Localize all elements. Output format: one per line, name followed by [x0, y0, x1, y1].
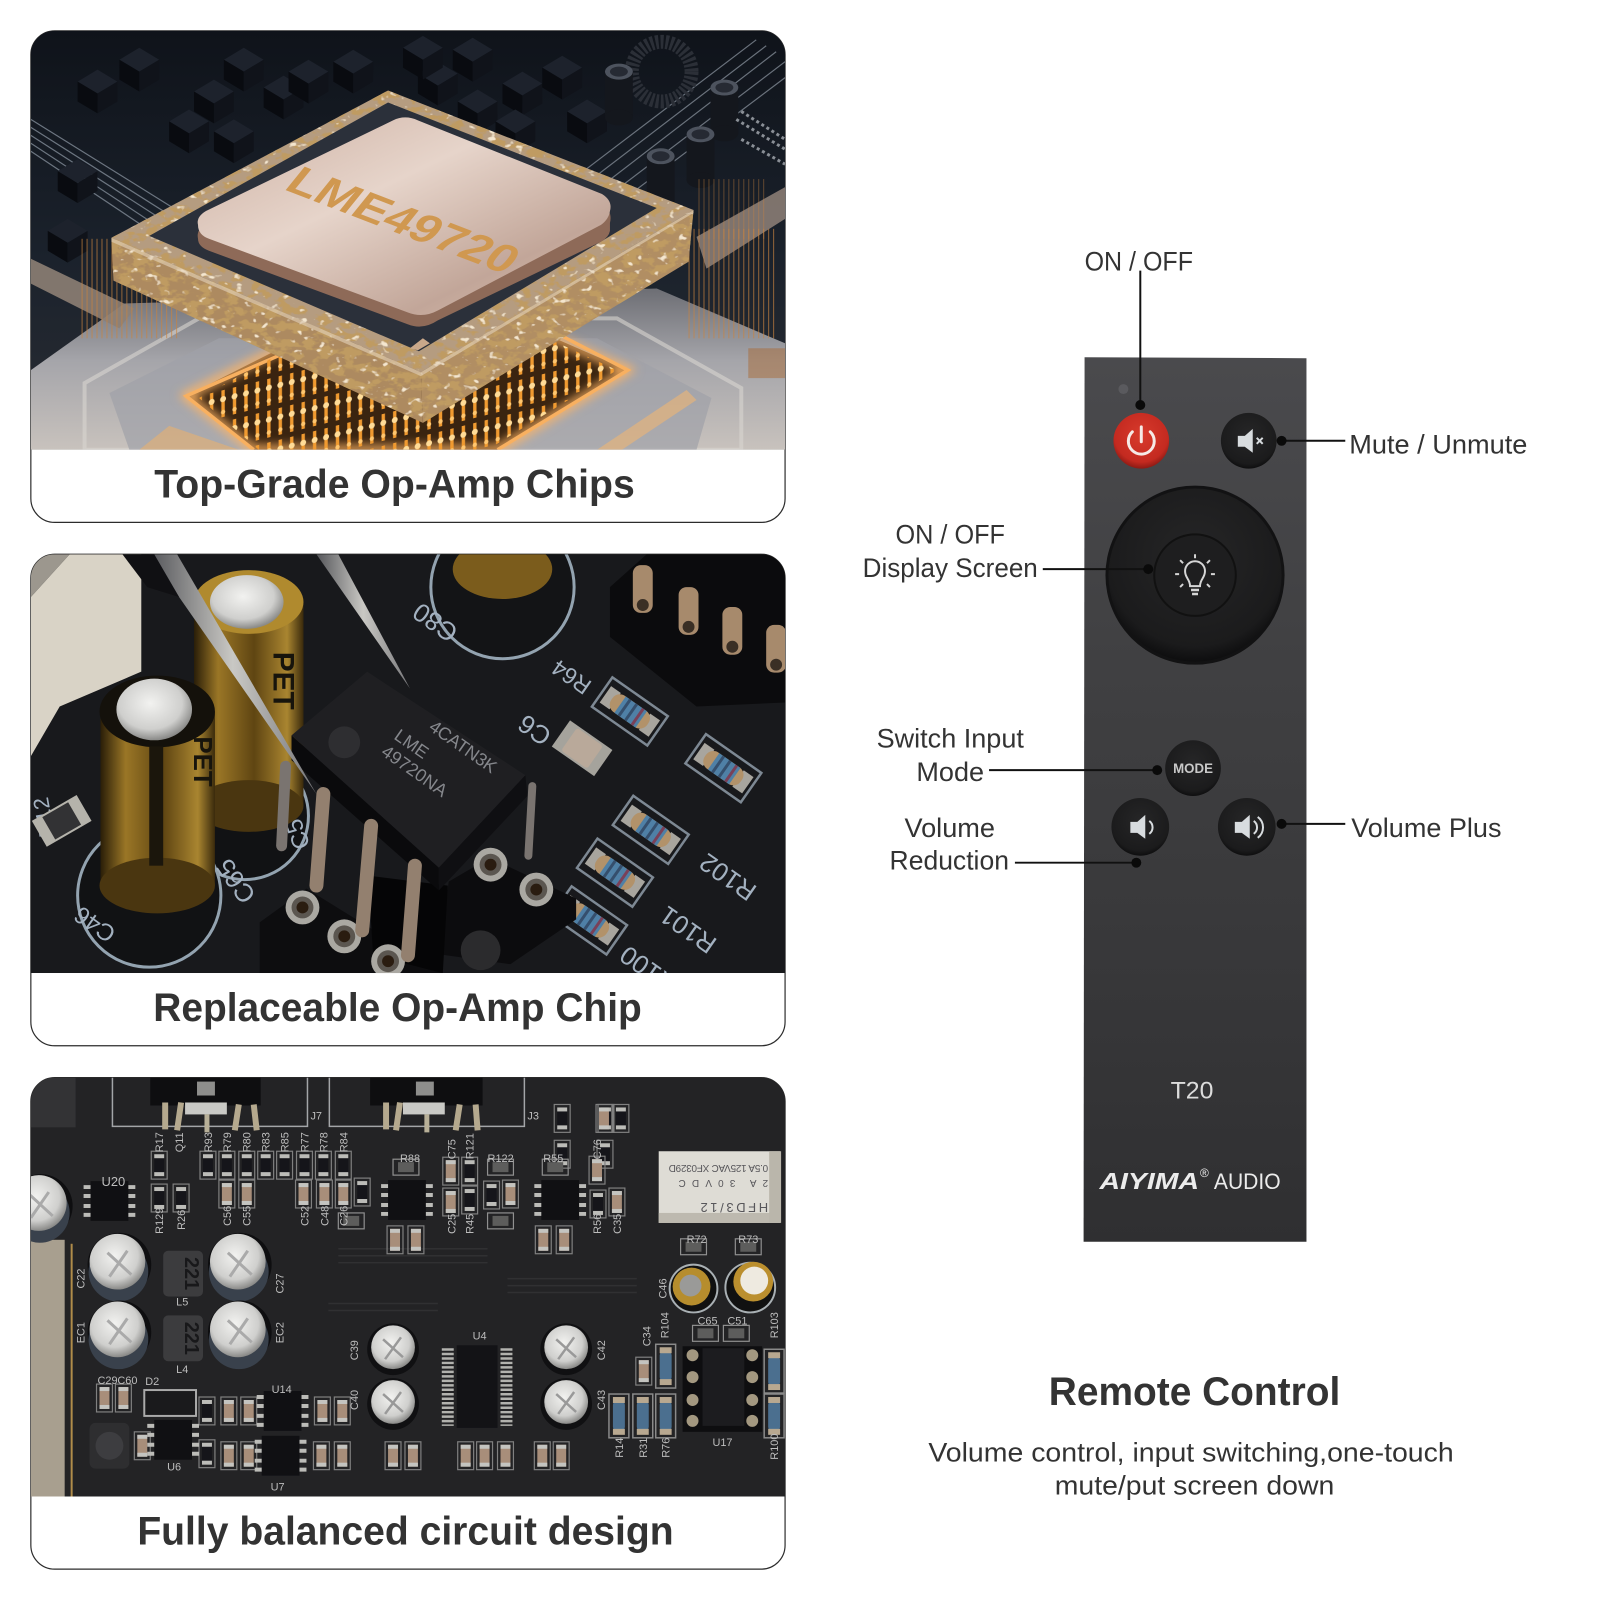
silkscreen designators: R121 — [465, 1133, 477, 1159]
remote control — [1084, 357, 1306, 1242]
panel: top-grade op-amp chips — [31, 31, 785, 522]
callout: display screen: ON / OFF — [896, 519, 1005, 549]
silkscreen designators: U7 — [271, 1482, 285, 1494]
silkscreen designators: R93 — [203, 1132, 215, 1152]
relay block — [31, 554, 141, 756]
silkscreen designators: C40 — [349, 1390, 361, 1410]
button: mode — [1165, 740, 1221, 796]
photo: chip held by tweezers above socket: R101 — [655, 900, 722, 958]
photo: chip held by tweezers above socket: R100 — [615, 940, 682, 998]
silkscreen designators: C76 — [592, 1139, 604, 1159]
photo: chip held by tweezers above socket: R102 — [695, 847, 762, 906]
relay: 2A 30VDC — [679, 1177, 768, 1188]
dark chip substrate — [149, 102, 657, 351]
silkscreen designators: C39 — [349, 1340, 361, 1360]
silkscreen designators: C46 — [658, 1278, 670, 1299]
silkscreen designators: C22 — [76, 1268, 88, 1289]
silkscreen designators: C29 — [98, 1375, 118, 1387]
capacitor: rear: PET — [267, 652, 300, 710]
silkscreen designators: C55 — [242, 1206, 254, 1226]
photo: chip held by tweezers above socket: C6 — [514, 708, 557, 750]
icon: light bulb — [1175, 554, 1215, 594]
silkscreen designators: R72 — [687, 1234, 707, 1246]
relay: 0.5A 125VAC XF0329D — [669, 1162, 768, 1173]
callout: input mode: Mode — [916, 757, 984, 787]
chip legs — [282, 766, 532, 955]
silkscreen designators: D2 — [145, 1376, 159, 1388]
silkscreen designators: EC2 — [275, 1322, 287, 1343]
photo: chip held by tweezers above socket: C46 — [69, 900, 121, 948]
callout: input mode: Switch Input — [877, 723, 1024, 753]
silkscreen designators: C35 — [612, 1214, 624, 1234]
silkscreen designators: R17 — [154, 1132, 166, 1152]
photo: chip held by tweezers above socket: C51 — [276, 803, 316, 853]
silkscreen designators: R56 — [592, 1214, 604, 1234]
photo: chip held by tweezers above socket: C80 — [408, 597, 463, 647]
silkscreen designators: R100 — [769, 1434, 781, 1460]
description: Volume control, input switching,one-touch — [928, 1438, 1454, 1468]
LED indicator — [1118, 384, 1128, 394]
button: power — [1113, 413, 1169, 469]
electrolytic capacitors — [9, 1174, 592, 1430]
dial — [1105, 486, 1285, 665]
silkscreen designators: R88 — [400, 1153, 420, 1165]
model label: T20 — [1171, 1078, 1213, 1105]
callout: volume reduction: Volume — [904, 813, 995, 843]
callout: display screen: Display Screen — [863, 553, 1038, 583]
caption: Replaceable Op-Amp Chip — [153, 986, 642, 1030]
silkscreen designators: C27 — [275, 1273, 287, 1294]
silkscreen designators: C34 — [642, 1326, 654, 1346]
silkscreen designators: R83 — [261, 1132, 273, 1152]
button: volume up — [1218, 798, 1276, 856]
capacitor rows — [97, 1104, 652, 1470]
silkscreen designators: R84 — [338, 1132, 350, 1152]
callout: on/off power: ON / OFF — [1085, 247, 1193, 277]
silkscreen designators: C48 — [319, 1206, 331, 1226]
capacitor: rear — [194, 570, 303, 832]
silkscreen designators: L5 — [176, 1296, 188, 1308]
brand logo: ® — [1200, 1166, 1209, 1180]
photo: chip held by tweezers above socket: R12 — [28, 795, 60, 839]
button: mode: MODE — [1173, 760, 1213, 776]
silkscreen designators: R104 — [660, 1312, 672, 1338]
description — [928, 1438, 1454, 1501]
silkscreen designators: C25 — [447, 1214, 459, 1234]
socketed chip U17 — [683, 1346, 762, 1432]
callout: volume plus — [1277, 813, 1501, 843]
photo: chip held by tweezers above socket — [31, 554, 785, 974]
remote body — [1084, 357, 1306, 1242]
silkscreen designators: R31 — [638, 1438, 650, 1458]
silkscreen designators: R129 — [154, 1208, 166, 1234]
silkscreen designators: R77 — [299, 1132, 311, 1152]
photo: audio circuit board — [9, 1065, 785, 1497]
pin header — [610, 554, 786, 706]
resistors — [551, 677, 761, 954]
silkscreen designators: R76 — [661, 1438, 673, 1458]
callout: display screen — [863, 519, 1153, 583]
photo: LME49720 chip on circuit board — [31, 31, 785, 450]
brand logo: AIYIMA — [1098, 1168, 1199, 1194]
silkscreen designators: R122 — [488, 1153, 514, 1165]
gold capacitors — [670, 1262, 775, 1312]
chip body: LME — [391, 725, 432, 763]
silkscreen designators: EC1 — [76, 1322, 88, 1343]
tweezers — [122, 554, 410, 794]
silkscreen designators: C51 — [727, 1315, 747, 1327]
brand logo — [1098, 1166, 1281, 1194]
button: mute — [1221, 413, 1277, 469]
heading: remote control: Remote Control — [1049, 1370, 1340, 1414]
silkscreen designators: C43 — [596, 1390, 608, 1410]
chip body — [292, 722, 527, 890]
gold acrylic block — [111, 91, 694, 423]
brand logo: AUDIO — [1214, 1169, 1281, 1194]
panel: fully balanced circuit design — [9, 1065, 785, 1569]
photo: chip held by tweezers above socket: C65 — [211, 853, 262, 908]
silkscreen designators: U14 — [272, 1384, 292, 1396]
socket — [260, 848, 576, 978]
silkscreen designators: R80 — [242, 1132, 254, 1152]
chip marking: LME49720 — [276, 159, 530, 283]
connector outlines and connectors — [112, 1078, 526, 1132]
relay — [659, 1151, 781, 1223]
silkscreen designators: R103 — [769, 1312, 781, 1338]
relay: HFD3/12 — [700, 1200, 768, 1215]
caption: Top-Grade Op-Amp Chips — [154, 463, 635, 507]
callout: input mode — [877, 723, 1162, 787]
through-hole resistors — [609, 1344, 784, 1438]
silkscreen designators: R85 — [280, 1132, 292, 1152]
silkscreen designators: C26 — [338, 1206, 350, 1226]
silkscreen designators: R55 — [543, 1153, 563, 1165]
chip body: 4CATN3K — [426, 716, 501, 777]
caption: Fully balanced circuit design — [137, 1509, 674, 1553]
callout: volume reduction: Reduction — [890, 846, 1009, 876]
silkscreen designators: R26 — [176, 1210, 188, 1230]
metal chip lid — [198, 117, 611, 350]
horizontal parts — [338, 1159, 761, 1341]
callout: on/off power — [1085, 247, 1193, 410]
inductors — [90, 1251, 203, 1469]
photo: chip held by tweezers above socket: R64 — [546, 654, 596, 700]
silkscreen designators: C65 — [698, 1315, 718, 1327]
silkscreen designators: C52 — [299, 1206, 311, 1226]
silkscreen designators: Q11 — [174, 1132, 186, 1152]
silkscreen designators: L4 — [176, 1364, 188, 1376]
silkscreen designators: U17 — [712, 1437, 733, 1449]
ICs — [84, 1180, 586, 1476]
panel: replaceable op-amp chip — [28, 515, 786, 1046]
silkscreen designators — [76, 1110, 781, 1494]
silkscreen designators: R14 — [614, 1438, 626, 1458]
silkscreen designators: C56 — [222, 1206, 234, 1226]
chip body: 49720NA — [378, 741, 451, 801]
silkscreen designators: U20 — [101, 1174, 125, 1189]
silkscreen designators: R73 — [738, 1234, 758, 1246]
callout: volume plus: Volume Plus — [1351, 813, 1501, 843]
silkscreen designators: U4 — [473, 1330, 487, 1342]
silkscreen designators: C42 — [596, 1340, 608, 1360]
capacitor: front: PET — [188, 736, 216, 787]
callout: volume reduction — [890, 813, 1141, 876]
silkscreen designators: U6 — [167, 1462, 181, 1474]
callout: mute: Mute / Unmute — [1349, 430, 1527, 460]
silkscreen designators: R79 — [222, 1132, 234, 1152]
silkscreen designators: R78 — [318, 1132, 330, 1152]
translucent circuit plates — [31, 179, 785, 450]
description: mute/put screen down — [1055, 1471, 1334, 1501]
silkscreen designators: C60 — [117, 1375, 137, 1387]
silkscreen designators: J7 — [310, 1110, 322, 1122]
silkscreen designators: R45 — [465, 1214, 477, 1234]
silkscreen designators: C75 — [447, 1139, 459, 1159]
tantalum part — [552, 720, 612, 776]
button: volume down — [1111, 798, 1169, 856]
capacitor: front — [100, 676, 216, 913]
resistor row — [151, 1104, 629, 1468]
glowing pin well — [176, 322, 638, 450]
silkscreen designators: J3 — [527, 1110, 539, 1122]
